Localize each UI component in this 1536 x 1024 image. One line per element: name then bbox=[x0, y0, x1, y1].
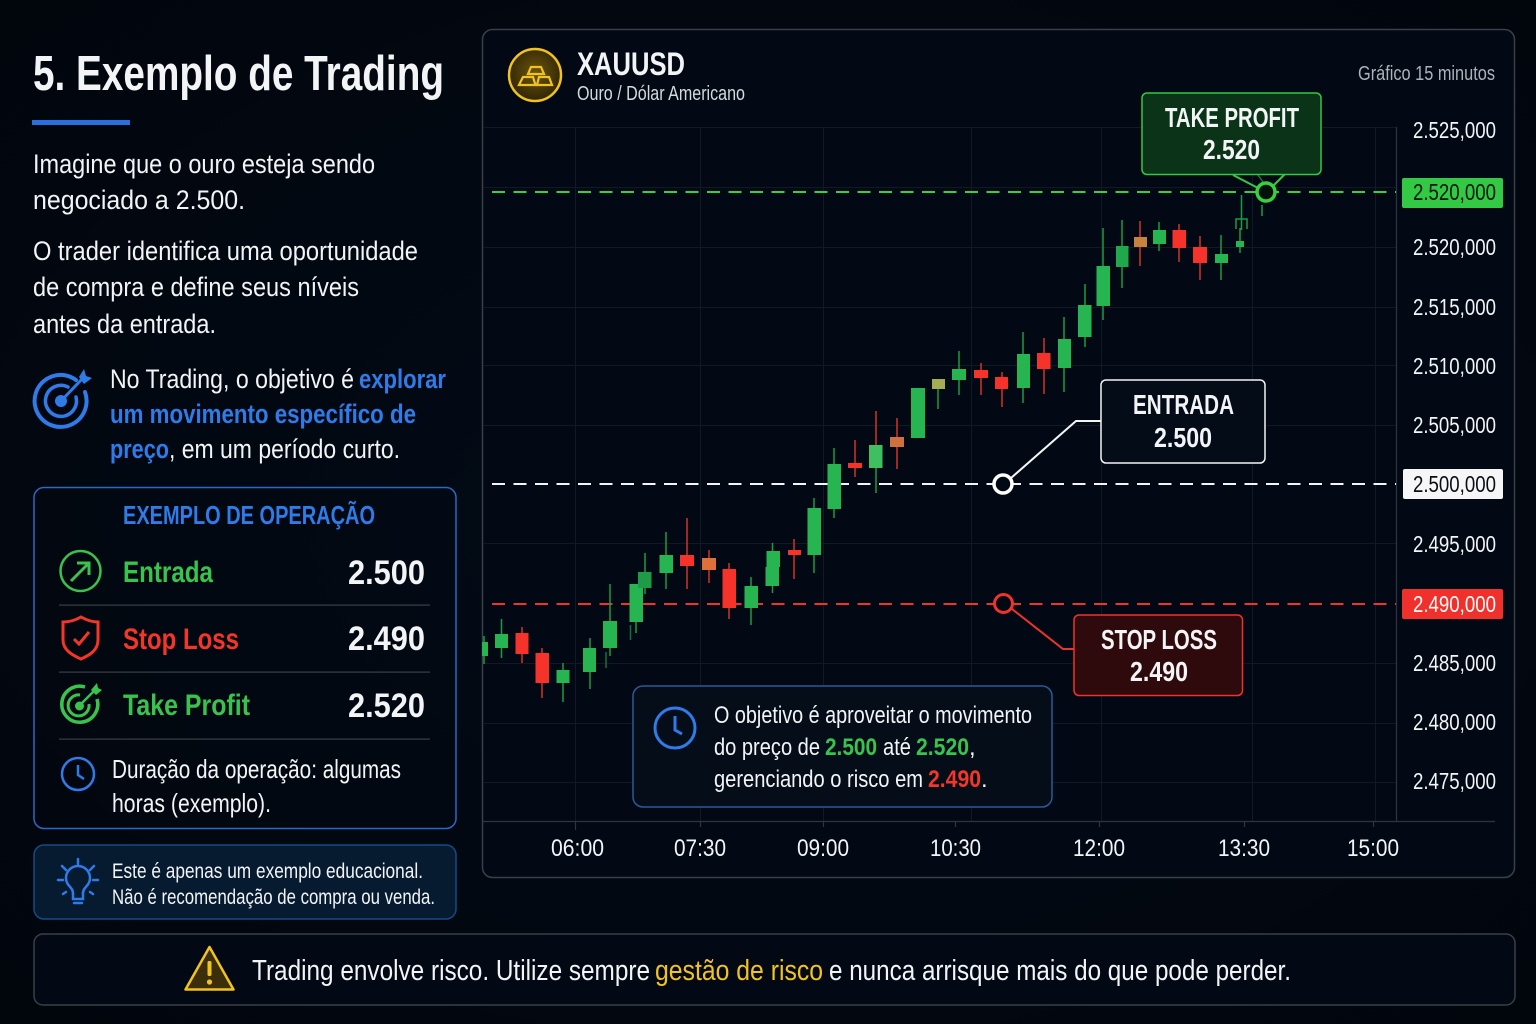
y axis labels: 2.505,000 bbox=[1413, 412, 1496, 438]
panel heading: EXEMPLO DE OPERAÇÃO bbox=[123, 500, 375, 530]
x axis labels: 07:30 bbox=[674, 835, 726, 862]
row: duração bbox=[62, 754, 401, 818]
price tag: stop loss bbox=[1402, 589, 1503, 619]
callout: objetivo: , bbox=[969, 734, 976, 761]
panel: risk warning: gestão de risco bbox=[655, 955, 823, 987]
price level lines bbox=[492, 192, 1396, 604]
chart axes bbox=[483, 127, 1495, 830]
y axis labels: 2.525,000 bbox=[1413, 117, 1496, 143]
icon: blue target bbox=[35, 369, 92, 427]
timeframe label: Gráfico 15 minutos bbox=[1358, 63, 1495, 85]
objective text: explorar bbox=[359, 364, 446, 394]
callout: stop loss: 2.490 bbox=[1130, 656, 1188, 687]
callout: stop loss: STOP LOSS bbox=[1101, 624, 1217, 655]
intro text: antes da entrada. bbox=[33, 309, 216, 339]
callout: entrada: 2.500 bbox=[1154, 422, 1212, 453]
row: take profit: Take Profit bbox=[123, 689, 250, 722]
icon: clock bbox=[655, 708, 695, 748]
intro text: de compra e define seus níveis bbox=[33, 272, 359, 302]
objective text: um movimento específico de bbox=[110, 399, 416, 429]
callout: stop loss bbox=[994, 594, 1242, 696]
y axis labels: 2.520,000 bbox=[1413, 234, 1496, 260]
intro text bbox=[33, 149, 418, 339]
y axis labels: 2.485,000 bbox=[1413, 650, 1496, 676]
intro text: Imagine que o ouro esteja sendo bbox=[33, 149, 375, 179]
icon: light bulb bbox=[58, 859, 98, 903]
title: 5. Exemplo de Trading bbox=[33, 47, 444, 101]
objective text: preço bbox=[110, 434, 169, 464]
x axis labels: 09:00 bbox=[797, 835, 849, 862]
row: take profit bbox=[62, 683, 425, 725]
chart title bbox=[577, 46, 745, 105]
panel: risk warning: e nunca arrisque mais do que pode perder. bbox=[829, 955, 1291, 987]
price tag: stop loss: 2.490,000 bbox=[1413, 591, 1496, 617]
row: stop loss bbox=[63, 617, 425, 659]
x axis labels: 13:30 bbox=[1218, 835, 1270, 862]
price tag: take profit bbox=[1402, 178, 1503, 208]
panel: educational note: Não é recomendação de compra ou venda. bbox=[112, 886, 435, 909]
row: entrada: 2.500 bbox=[348, 554, 425, 592]
price tag: take profit: 2.520,000 bbox=[1413, 179, 1496, 205]
row: duração: horas (exemplo). bbox=[112, 788, 271, 818]
callout: entrada bbox=[994, 380, 1265, 493]
panel: chart bbox=[482, 30, 1514, 878]
panel: exemplo de operação bbox=[34, 488, 456, 828]
x axis labels: 15:00 bbox=[1347, 835, 1399, 862]
callout: objetivo bbox=[633, 686, 1052, 807]
y axis labels: 2.515,000 bbox=[1413, 294, 1496, 320]
x axis labels: 10:30 bbox=[930, 835, 981, 862]
candlesticks bbox=[482, 195, 1262, 702]
callout: take profit bbox=[1142, 93, 1321, 201]
panel: educational note bbox=[34, 845, 456, 919]
price tag: entrada: 2.500,000 bbox=[1413, 471, 1496, 497]
x axis labels bbox=[551, 835, 1399, 862]
callout: take profit: 2.520 bbox=[1203, 134, 1260, 165]
intro text: O trader identifica uma oportunidade bbox=[33, 236, 418, 266]
callout: objetivo: 2.520 bbox=[916, 734, 969, 761]
y axis labels: 2.510,000 bbox=[1413, 353, 1496, 379]
chart title: Ouro / Dólar Americano bbox=[577, 83, 745, 105]
icon: warning triangle bbox=[186, 947, 234, 990]
callout: objetivo: . bbox=[981, 766, 988, 793]
row: entrada bbox=[60, 551, 425, 592]
title bbox=[32, 47, 444, 125]
callout: objetivo: do preço de bbox=[714, 734, 820, 761]
objective text: , em um período curto. bbox=[169, 434, 400, 464]
chart grid bbox=[483, 127, 1396, 821]
y axis labels: 2.475,000 bbox=[1413, 768, 1496, 794]
callout: take profit: TAKE PROFIT bbox=[1165, 102, 1299, 133]
callout: objetivo: até bbox=[883, 734, 911, 761]
row: duração: Duração da operação: algumas bbox=[112, 754, 401, 784]
x axis labels: 12:00 bbox=[1073, 835, 1125, 862]
intro text: negociado a 2.500. bbox=[33, 185, 245, 215]
y axis labels: 2.495,000 bbox=[1413, 531, 1496, 557]
x axis labels: 06:00 bbox=[551, 835, 604, 862]
callout: entrada: ENTRADA bbox=[1133, 389, 1234, 420]
y axis labels: 2.480,000 bbox=[1413, 709, 1496, 735]
callout: objetivo: O objetivo é aproveitar o movimento bbox=[714, 702, 1032, 729]
panel: risk warning: Trading envolve risco. Utilize sempre bbox=[252, 955, 650, 987]
y axis labels bbox=[1413, 117, 1496, 794]
icon: gold bars bbox=[509, 49, 561, 101]
row: stop loss: Stop Loss bbox=[123, 623, 239, 656]
row: stop loss: 2.490 bbox=[348, 620, 425, 658]
row: take profit: 2.520 bbox=[348, 687, 425, 725]
panel: risk warning bbox=[34, 934, 1515, 1005]
chart title: XAUUSD bbox=[577, 46, 685, 82]
objective text: No Trading, o objetivo é bbox=[110, 364, 354, 394]
objective text bbox=[110, 364, 446, 464]
callout: objetivo: 2.500 bbox=[825, 734, 877, 761]
row: entrada: Entrada bbox=[123, 556, 213, 589]
callout: objetivo: 2.490 bbox=[928, 766, 981, 793]
panel: educational note: Este é apenas um exemplo educacional. bbox=[112, 860, 423, 883]
callout: objetivo: gerenciando o risco em bbox=[714, 766, 923, 793]
